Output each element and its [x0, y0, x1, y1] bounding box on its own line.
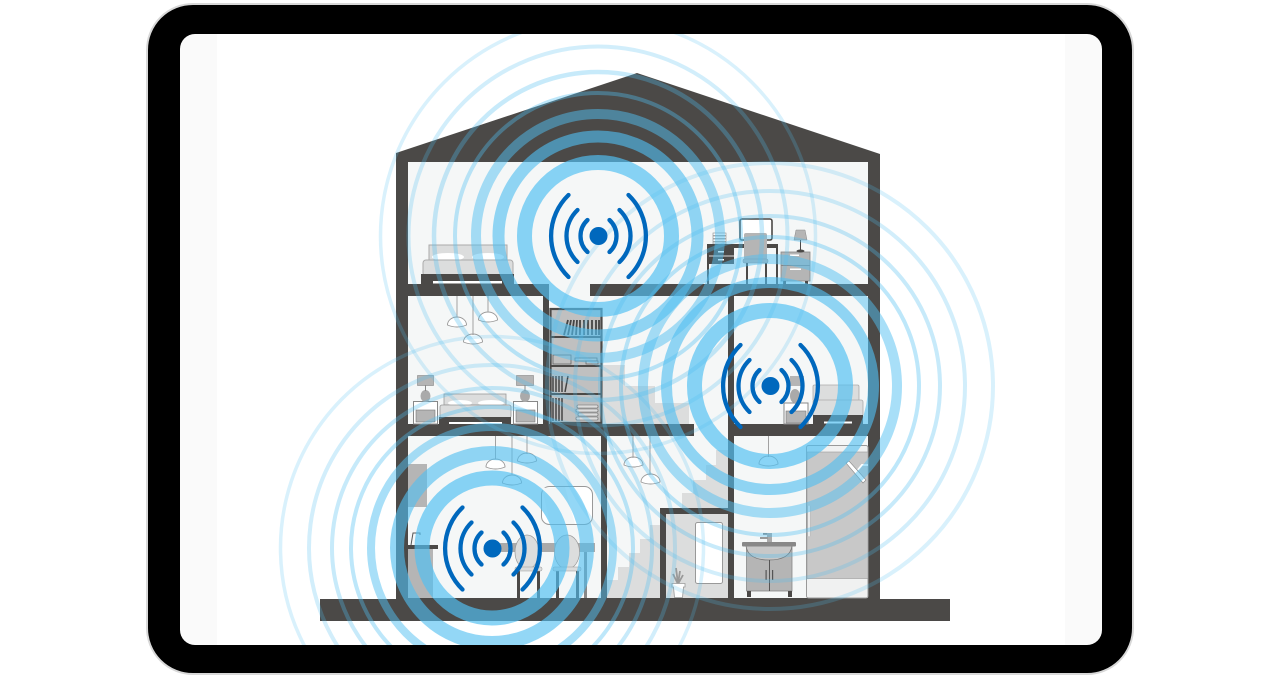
attic bed [421, 245, 514, 284]
house shell and ground slab [320, 73, 950, 621]
closet under stairs [660, 508, 728, 598]
icon: router signal, bottom [445, 508, 540, 590]
ground floor pendant lamps [486, 436, 660, 485]
bathroom vanity [742, 533, 796, 597]
dining table and chairs [500, 535, 595, 598]
house cross-section [320, 73, 950, 621]
plant [672, 568, 685, 598]
signal rings: right router [547, 163, 993, 609]
bedroom pendant lamps [448, 296, 498, 344]
signal waves [280, 18, 993, 669]
signal rings: top router [380, 18, 816, 454]
bedroom bed and nightstands [414, 376, 538, 424]
bathroom pendant lamp [759, 436, 778, 466]
infographic canvas [146, 3, 1134, 675]
staircase [603, 365, 728, 598]
kitchen cabinets and faucet [408, 464, 438, 598]
icon: router signal, right [723, 345, 818, 427]
signal rings: bottom router [280, 337, 704, 669]
right bedroom bed and nightstand [784, 376, 863, 424]
attic desk with monitor and chair [707, 219, 778, 284]
attic side cabinet and lamp [781, 230, 810, 284]
shower cabin [806, 446, 868, 598]
bookshelf [550, 309, 602, 423]
icon: router signal, top [551, 195, 646, 277]
kitchen window [542, 486, 592, 524]
tablet frame [147, 4, 1133, 674]
